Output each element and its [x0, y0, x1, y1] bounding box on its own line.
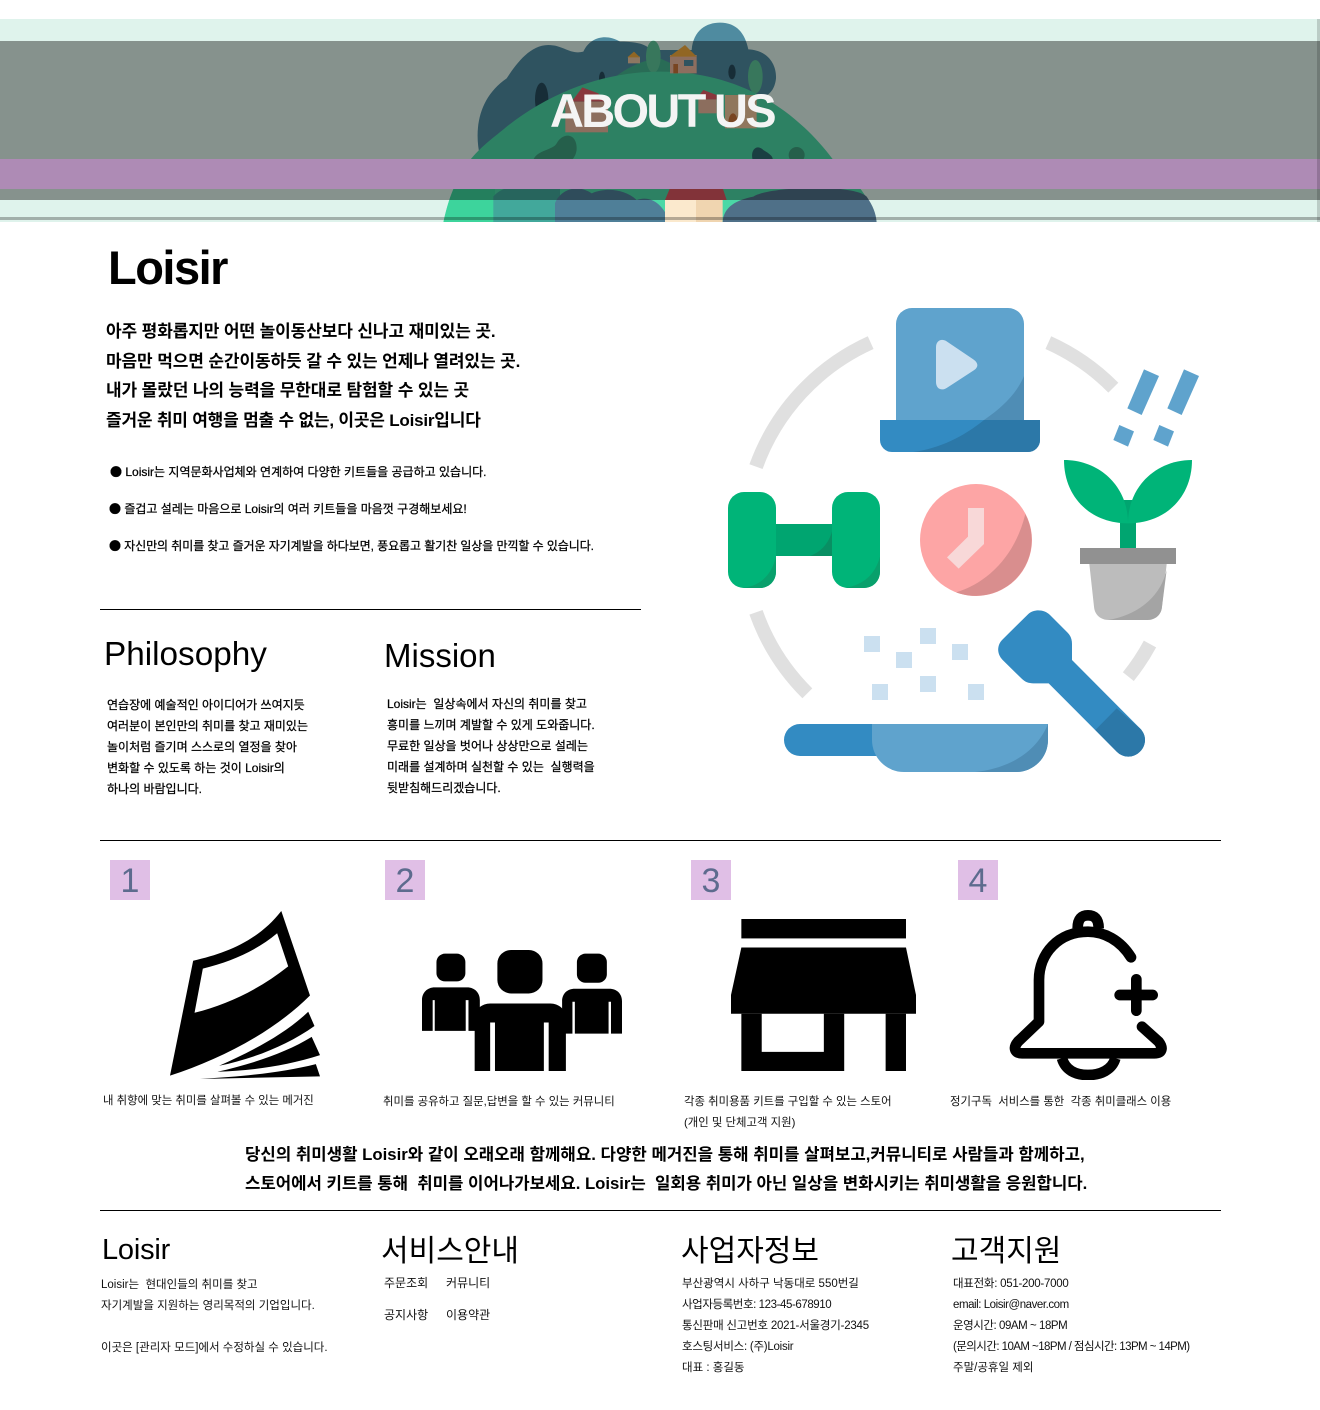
icon: clock	[920, 484, 1032, 596]
footer: customer support: email: Loisir@naver.com	[953, 1299, 1069, 1311]
footer: customer support: (문의시간: 10AM ~18PM / 점심시간: 13PM ~ 14PM)	[953, 1341, 1190, 1353]
footer: business info: 호스팅서비스: (주)Loisir	[682, 1341, 793, 1353]
mission text: 흥미를 느끼며 계발할 수 있게 도와줍니다.	[387, 718, 595, 732]
footer: Loisir: Loisir	[102, 1234, 170, 1266]
mission text: 무료한 일상을 벗어나 상상만으로 설레는	[387, 739, 588, 753]
philosophy heading: Philosophy	[104, 636, 267, 673]
philosophy text: 여러분이 본인만의 취미를 찾고 재미있는	[107, 719, 308, 733]
caption 4: 정기구독 서비스를 통한 각종 취미클래스 이용	[950, 1096, 1171, 1108]
icon: community people	[422, 950, 622, 1071]
footer: Loisir: 자기계발을 지원하는 영리목적의 기업입니다.	[101, 1300, 315, 1312]
philosophy text	[107, 698, 308, 796]
number badge 3: 3	[702, 862, 720, 900]
bullet list: ● 즐겁고 설레는 마음으로 Loisir의 여러 키트들을 마음껏 구경해보세요!	[109, 500, 467, 517]
icon: seasoning particles	[864, 628, 984, 700]
footer: service guide	[381, 1235, 519, 1322]
icon: rain drops	[1113, 369, 1199, 447]
footer: business info: 부산광역시 사하구 낙동대로 550번길	[682, 1278, 859, 1290]
footer: business info: 사업자등록번호: 123-45-678910	[682, 1299, 831, 1311]
footer: business info: 사업자정보	[681, 1235, 819, 1268]
number badge 2	[385, 860, 425, 900]
footer: business info	[681, 1235, 869, 1374]
icon: dumbbell	[728, 492, 880, 588]
icon: spatula	[998, 610, 1145, 757]
number badge 4	[958, 860, 998, 900]
mission text: 뒷받침해드리겠습니다.	[387, 781, 501, 795]
caption 3: (개인 및 단체고객 지원)	[684, 1117, 795, 1129]
icon: magazine	[170, 911, 320, 1079]
mission text: 미래를 설계하며 실천할 수 있는 실행력을	[387, 760, 595, 774]
bullet list	[109, 463, 594, 554]
banner: about us	[0, 19, 1320, 222]
philosophy text: 하나의 바람입니다.	[107, 782, 202, 796]
bullet list: ● Loisir는 지역문화사업체와 연계하여 다양한 키트들을 공급하고 있습니다.	[110, 463, 486, 480]
footer: Loisir: Loisir는 현대인들의 취미를 찾고	[101, 1279, 258, 1291]
banner title: ABOUT US	[550, 84, 774, 137]
footer: service guide: 이용약관	[446, 1308, 490, 1322]
philosophy text: 연습장에 예술적인 아이디어가 쓰여지듯	[107, 698, 305, 712]
icon: laptop	[880, 308, 1040, 452]
footer: customer support: 운영시간: 09AM ~ 18PM	[953, 1320, 1067, 1332]
footer: service guide: 커뮤니티	[446, 1276, 490, 1290]
intro text block: 즐거운 취미 여행을 멈출 수 없는, 이곳은 Loisir입니다	[106, 411, 481, 430]
caption 3	[684, 1095, 892, 1129]
footer: service guide: 공지사항	[384, 1308, 428, 1322]
closing statement: 스토어에서 키트를 통해 취미를 이어나가보세요. Loisir는 일회용 취미가 아닌 일상을 변화시키는 취미생활을 응원합니다.	[245, 1174, 1087, 1193]
closing statement	[245, 1145, 1087, 1193]
caption 3: 각종 취미용품 키트를 구입할 수 있는 스토어	[684, 1096, 892, 1108]
intro text block	[106, 322, 520, 430]
number badge 3	[691, 860, 731, 900]
footer: service guide: 서비스안내	[381, 1235, 519, 1268]
philosophy text: 놀이처럼 즐기며 스스로의 열정을 찾아	[107, 740, 297, 754]
panel: philosophy	[104, 636, 308, 796]
footer: Loisir	[101, 1234, 328, 1354]
footer: service guide: 주문조회	[384, 1276, 428, 1290]
mission text	[387, 697, 595, 795]
intro text block: 아주 평화롭지만 어떤 놀이동산보다 신나고 재미있는 곳.	[106, 322, 495, 341]
icon: plant	[1064, 460, 1192, 620]
footer: business info: 대표 : 홍길동	[682, 1362, 744, 1374]
caption 2: 취미를 공유하고 질문,답변을 할 수 있는 커뮤니티	[383, 1096, 615, 1108]
philosophy text: 변화할 수 있도록 하는 것이 Loisir의	[107, 761, 285, 775]
footer: customer support: 고객지원	[951, 1235, 1061, 1268]
panel: mission	[384, 637, 595, 795]
footer: customer support	[951, 1235, 1190, 1374]
bullet list: ● 자신만의 취미를 찾고 즐거운 자기계발을 하다보면, 풍요롭고 활기찬 일상을 만끽할 수 있습니다.	[109, 537, 594, 554]
closing statement: 당신의 취미생활 Loisir와 같이 오래오래 함께해요. 다양한 메거진을 통해 취미를 살펴보고,커뮤니티로 사람들과 함께하고,	[245, 1145, 1085, 1164]
icon: bell with plus	[1010, 910, 1167, 1080]
footer: business info: 통신판매 신고번호 2021-서울경기-2345	[682, 1320, 869, 1332]
mission heading: Mission	[384, 637, 496, 674]
heading: Loisir: Loisir	[108, 241, 227, 294]
number badge 2: 2	[396, 862, 414, 900]
icon: frying pan	[784, 724, 1048, 772]
number badge 1: 1	[121, 862, 139, 900]
icon: store	[731, 919, 916, 1071]
footer: customer support: 대표전화: 051-200-7000	[953, 1278, 1068, 1290]
mission text: Loisir는 일상속에서 자신의 취미를 찾고	[387, 697, 587, 711]
ring arcs	[756, 343, 1150, 693]
number badge 4: 4	[969, 862, 987, 900]
intro text block: 내가 몰랐던 나의 능력을 무한대로 탐험할 수 있는 곳	[106, 381, 469, 400]
caption 1: 내 취향에 맞는 취미를 살펴볼 수 있는 메거진	[103, 1095, 314, 1107]
footer: customer support: 주말/공휴일 제외	[953, 1362, 1033, 1374]
intro text block: 마음만 먹으면 순간이동하듯 갈 수 있는 언제나 열려있는 곳.	[106, 352, 520, 371]
illustration: hobby icons in a ring	[728, 308, 1199, 772]
number badge 1	[110, 860, 150, 900]
footer: Loisir: 이곳은 [관리자 모드]에서 수정하실 수 있습니다.	[101, 1342, 328, 1354]
